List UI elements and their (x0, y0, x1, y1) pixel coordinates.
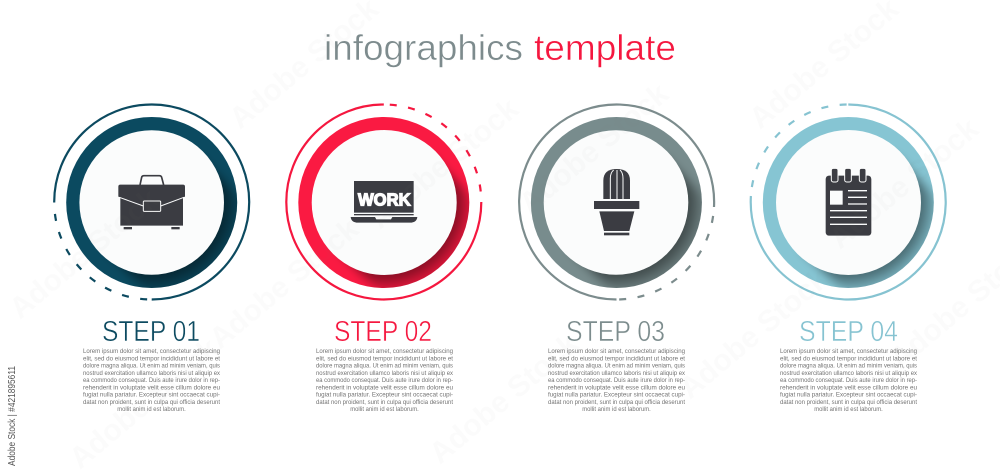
text block: step 03: fugiat nulla pariatur. Excepteur sint occaecat cupi- (548, 392, 685, 398)
text block: step 02: ea commodo consequat. Duis aute irure dolor in rep- (316, 377, 453, 384)
icon: laptop with work label: WORK (358, 189, 411, 209)
title (324, 27, 676, 68)
text block: step 04: nostrud exercitation ullamco laboris nisi ut aliquip ex (780, 370, 918, 377)
text block: step 02 (316, 348, 454, 413)
text block: step 03 (548, 348, 686, 413)
watermark: stock text: Adobe Stock (363, 92, 525, 235)
icon: briefcase (118, 176, 185, 229)
icon: laptop with work label (351, 181, 417, 223)
icon: spiral notepad (826, 168, 871, 236)
ring: step 03 thick band with shadow (530, 117, 702, 288)
text block: step 01: dolore magna aliqua. Ut enim ad minim veniam, quis (83, 362, 221, 370)
text block: step 04: Lorem ipsum dolor sit amet, consectetur adipiscing (780, 348, 917, 355)
text block: step 02: mollit anim id est laborum. (350, 406, 419, 413)
panel: step 02 (286, 104, 498, 413)
text block: step 03: datat non proident, sunt in culpa qui officia deserunt (548, 399, 685, 406)
text block: step 01 (83, 348, 221, 413)
text block: step 04: fugiat nulla pariatur. Excepteur sint occaecat cupi- (780, 392, 917, 398)
text block: step 03: Lorem ipsum dolor sit amet, consectetur adipiscing (548, 348, 685, 355)
watermark: stock text: Adobe Stock (823, 112, 985, 255)
text block: step 02: datat non proident, sunt in culpa qui officia deserunt (316, 399, 453, 406)
watermark: stock text: Adobe Stock (63, 332, 225, 475)
text block: step 04: ea commodo consequat. Duis aute irure dolor in rep- (780, 377, 917, 384)
text block: step 04: dolore magna aliqua. Ut enim ad minim veniam, quis (780, 362, 918, 370)
text block: step 03: rehenderit in voluptate velit esse cillum dolore eu (548, 384, 685, 391)
panel: step 03 (519, 105, 730, 413)
text block: step 01: fugiat nulla pariatur. Excepteur sint occaecat cupi- (83, 392, 220, 398)
watermark: stock text: Adobe Stock (423, 327, 585, 470)
title: template (534, 27, 676, 68)
panel: step 01 (54, 105, 266, 413)
watermark: stock text: Adobe Stock (513, 77, 675, 220)
text block: step 02: Lorem ipsum dolor sit amet, consectetur adipiscing (316, 348, 453, 355)
watermark: stock text: Adobe Stock (203, 212, 365, 355)
heading: step 01: STEP 01 (102, 316, 200, 348)
text block: step 04: elit, sed do eiusmod tempor incididunt ut labore et (780, 355, 917, 362)
ring: step 04 thick band with shadow (762, 117, 934, 288)
watermark: stock text: Adobe Stock (673, 262, 835, 405)
heading: step 03: STEP 03 (566, 316, 665, 348)
text block: step 04: datat non proident, sunt in culpa qui officia deserunt (780, 399, 917, 406)
ring: step 01 thick band with shadow (66, 117, 238, 288)
ring: step 01 outer solid and dashed line (54, 105, 249, 300)
text block: step 02: dolore magna aliqua. Ut enim ad minim veniam, quis (316, 362, 454, 370)
text block: step 04: rehenderit in voluptate velit esse cillum dolore eu (780, 384, 917, 391)
heading: step 04: STEP 04 (799, 316, 898, 348)
text block: step 04: mollit anim id est laborum. (814, 406, 883, 413)
text block: step 01: nostrud exercitation ullamco laboris nisi ut aliquip ex (83, 370, 221, 377)
text block: step 01: rehenderit in voluptate velit esse cillum dolore eu (83, 384, 220, 391)
heading: step 02: STEP 02 (334, 316, 432, 348)
text block: step 01: mollit anim id est laborum. (117, 406, 186, 413)
text block: step 01: ea commodo consequat. Duis aute irure dolor in rep- (83, 377, 220, 384)
text block: step 02: fugiat nulla pariatur. Excepteur sint occaecat cupi- (316, 392, 453, 398)
text block: step 01: Lorem ipsum dolor sit amet, consectetur adipiscing (83, 348, 220, 355)
text block: step 03: nostrud exercitation ullamco laboris nisi ut aliquip ex (548, 370, 686, 377)
watermark: stock text: Adobe Stock (3, 182, 165, 325)
text block: step 02: rehenderit in voluptate velit esse cillum dolore eu (316, 384, 453, 391)
text block: step 01: elit, sed do eiusmod tempor incididunt ut labore et (83, 355, 220, 362)
text block: step 04 (780, 348, 918, 413)
text block: step 03: ea commodo consequat. Duis aute irure dolor in rep- (548, 377, 685, 384)
panel: step 04 (751, 104, 962, 413)
text block: step 03: dolore magna aliqua. Ut enim ad minim veniam, quis (548, 362, 686, 370)
text block: step 03: elit, sed do eiusmod tempor incididunt ut labore et (548, 355, 685, 362)
text block: step 03: mollit anim id est laborum. (582, 406, 651, 413)
text block: step 02: nostrud exercitation ullamco laboris nisi ut aliquip ex (316, 370, 454, 377)
title: infographics (324, 27, 523, 68)
ring: step 04 outer solid and dashed line (751, 104, 946, 299)
ring: step 03 outer solid and dashed line (519, 105, 714, 300)
credit: stock id: Adobe Stock | #421895611 (6, 366, 18, 466)
text block: step 02: elit, sed do eiusmod tempor incididunt ut labore et (316, 355, 453, 362)
ring: step 02 thick band with shadow (298, 117, 470, 288)
ring: step 02 outer solid and dashed line (286, 104, 481, 300)
text block: step 01: datat non proident, sunt in culpa qui officia deserunt (83, 399, 220, 406)
icon: potted cactus (594, 169, 639, 235)
